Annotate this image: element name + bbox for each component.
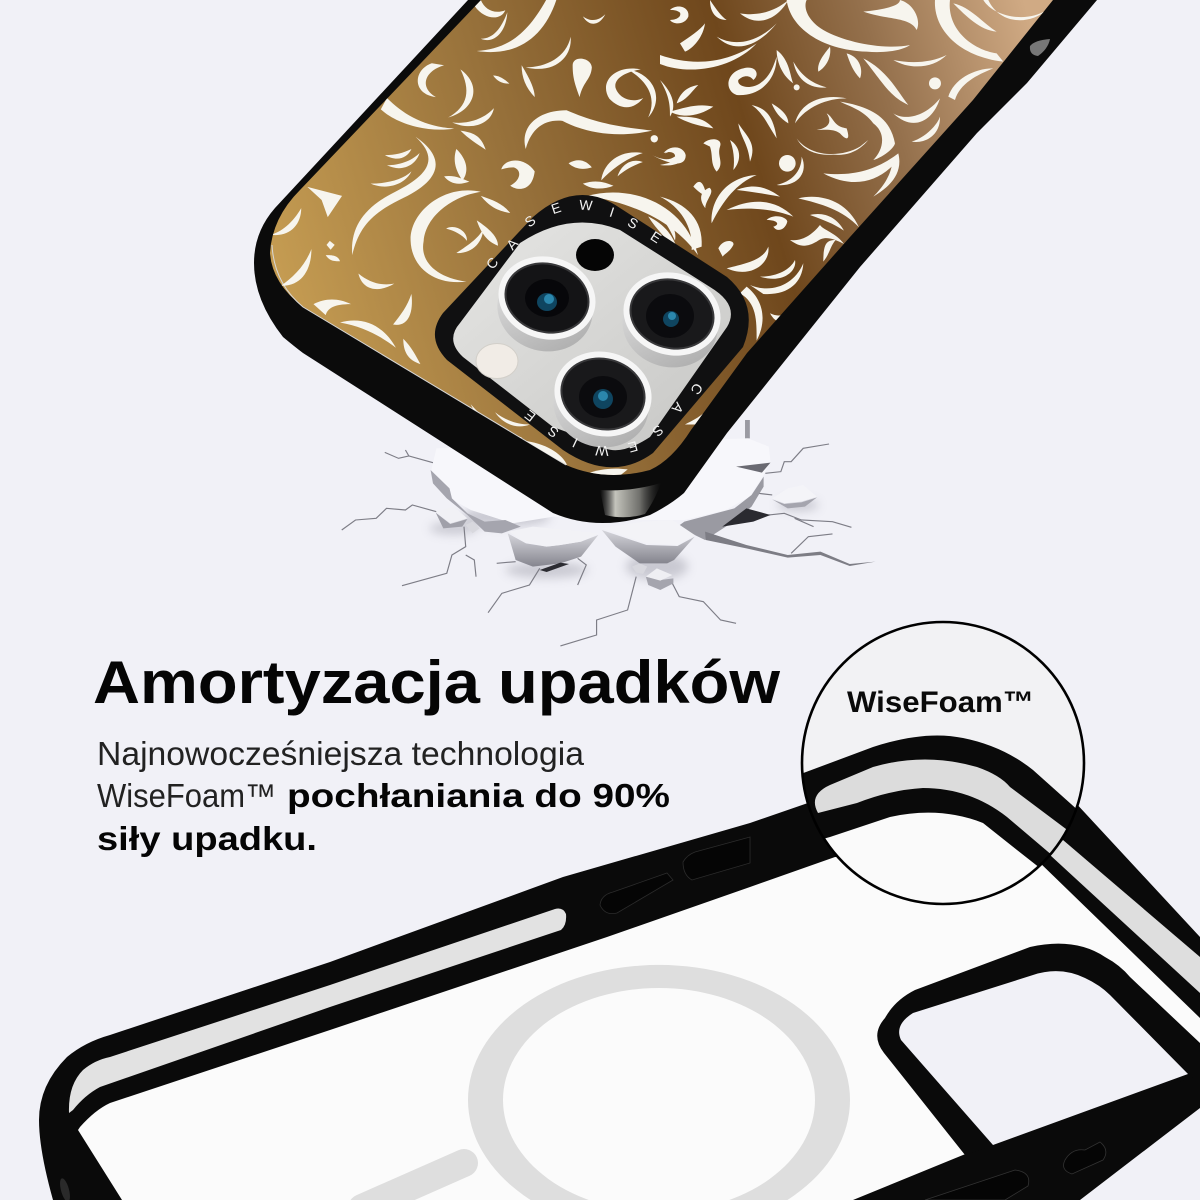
camera ring brand text: W <box>579 197 594 213</box>
top phone with gold case <box>254 0 1097 523</box>
body text <box>97 735 670 857</box>
left speaker slot <box>58 1177 72 1200</box>
rock plate <box>431 438 770 523</box>
side button glint <box>1030 39 1050 56</box>
camera ring brand text: S <box>521 212 539 230</box>
camera ring brand text: E <box>626 438 640 456</box>
bumper glare <box>600 483 661 517</box>
camera ring brand text: E <box>521 407 539 425</box>
lens 1 <box>488 246 605 362</box>
camera cutout rim <box>877 944 1200 1155</box>
body text: Najnowocześniejsza technologia <box>97 735 585 772</box>
illustration: cracked ground <box>342 420 876 646</box>
right foam channel <box>1050 840 1200 993</box>
body text: pochłaniania do 90% <box>287 777 670 814</box>
camera ring brand text: W <box>594 443 609 459</box>
clear back panel <box>78 857 1200 1200</box>
camera ring brand text: E <box>549 199 563 217</box>
camera ring brand text <box>483 197 706 459</box>
magnet ring <box>468 965 850 1200</box>
magnified case rim <box>804 736 1076 866</box>
camera ring brand text: S <box>625 214 641 232</box>
case bumper <box>254 0 1097 523</box>
camera cutout <box>899 971 1188 1145</box>
title: Amortyzacja upadków <box>93 649 780 716</box>
magnet alignment bar <box>362 1163 464 1200</box>
camera ring brand text: C <box>483 254 501 272</box>
rock fragments <box>436 485 817 590</box>
left foam channel <box>69 909 566 1113</box>
camera ring brand text: I <box>608 204 616 220</box>
camera island <box>435 195 749 467</box>
bottom clear case <box>39 770 1200 1200</box>
microphone hole <box>576 239 614 271</box>
camera ring brand text: S <box>649 422 667 440</box>
gold back panel <box>270 0 1053 475</box>
lens 3 <box>544 341 661 458</box>
camera ring brand text: C <box>688 380 706 398</box>
camera ring brand text: S <box>545 423 561 441</box>
camera ring brand text: A <box>503 235 522 253</box>
camera ring brand text: I <box>570 435 580 451</box>
swirl pattern <box>271 0 1047 476</box>
magnifier label: WiseFoam™ <box>847 686 1034 719</box>
body text: siły upadku. <box>97 820 317 857</box>
magnifier callout: WiseFoam <box>800 620 1086 906</box>
lower side buttons <box>925 1142 1106 1200</box>
camera ring brand text: A <box>668 399 687 417</box>
cracks <box>342 420 851 646</box>
lens 2 <box>613 262 730 378</box>
camera ring brand text: E <box>648 228 664 246</box>
case black frame <box>39 770 1200 1200</box>
phone camera plateau <box>453 222 731 450</box>
swirl pattern right side <box>660 0 1047 341</box>
body text: WiseFoam™ <box>97 777 276 814</box>
flash <box>476 344 518 378</box>
panel edge highlight <box>272 245 566 465</box>
volume buttons <box>600 837 750 914</box>
